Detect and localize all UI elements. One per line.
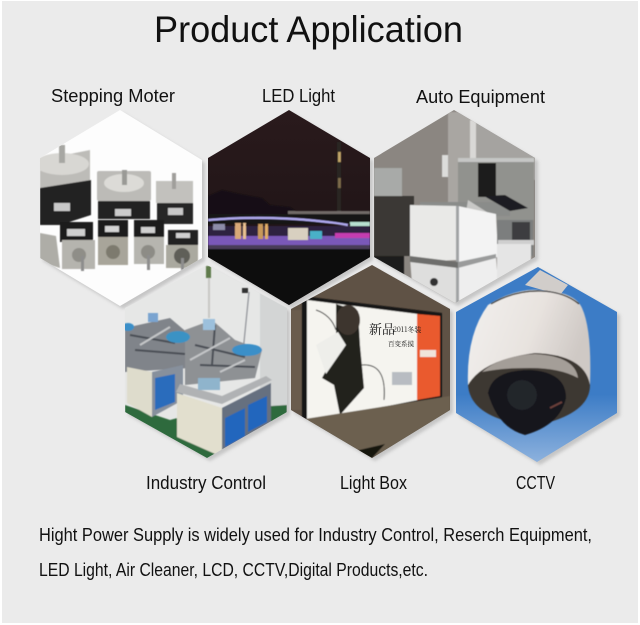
light box poster text bbox=[370, 322, 421, 347]
photo hexagon: light box bbox=[289, 263, 452, 460]
photo hexagon: industry control bbox=[122, 263, 289, 460]
light box poster text: 新品 bbox=[369, 319, 395, 338]
light box poster text: 2011冬装 bbox=[393, 325, 421, 335]
label: Stepping Moter: Stepping Moter bbox=[51, 86, 175, 106]
right motor bbox=[156, 173, 193, 224]
light box poster text: 百变系摸 bbox=[388, 339, 414, 348]
lens bbox=[488, 370, 566, 435]
description text: LED Light, Air Cleaner, LCD, CCTV,Digital Products,etc. bbox=[39, 560, 428, 580]
left cabinet bbox=[127, 367, 152, 417]
small motors bbox=[60, 222, 95, 271]
photo hexagon: CCTV dome camera bbox=[454, 265, 619, 464]
photo hexagon: stepping motors bbox=[35, 108, 204, 308]
middle motor bbox=[97, 170, 151, 219]
front cabinet bbox=[177, 393, 222, 457]
machinery tops bbox=[125, 318, 190, 372]
description text bbox=[39, 525, 592, 580]
title: Product Application bbox=[154, 9, 463, 50]
label: LED Light: LED Light bbox=[262, 86, 335, 106]
label: CCTV: CCTV bbox=[516, 473, 555, 493]
label: Industry Control: Industry Control bbox=[146, 473, 266, 493]
large motor left bbox=[35, 145, 91, 225]
label: Light Box: Light Box bbox=[340, 473, 407, 493]
description text: Hight Power Supply is widely used for Industry Control, Reserch Equipment, bbox=[39, 525, 592, 545]
photo hexagon: LED light night bridge bbox=[206, 108, 372, 309]
hexagon shadows bbox=[43, 113, 620, 465]
camera body bbox=[468, 290, 590, 385]
label: Auto Equipment: Auto Equipment bbox=[416, 87, 545, 107]
photo hexagon: auto equipment bbox=[372, 108, 538, 308]
